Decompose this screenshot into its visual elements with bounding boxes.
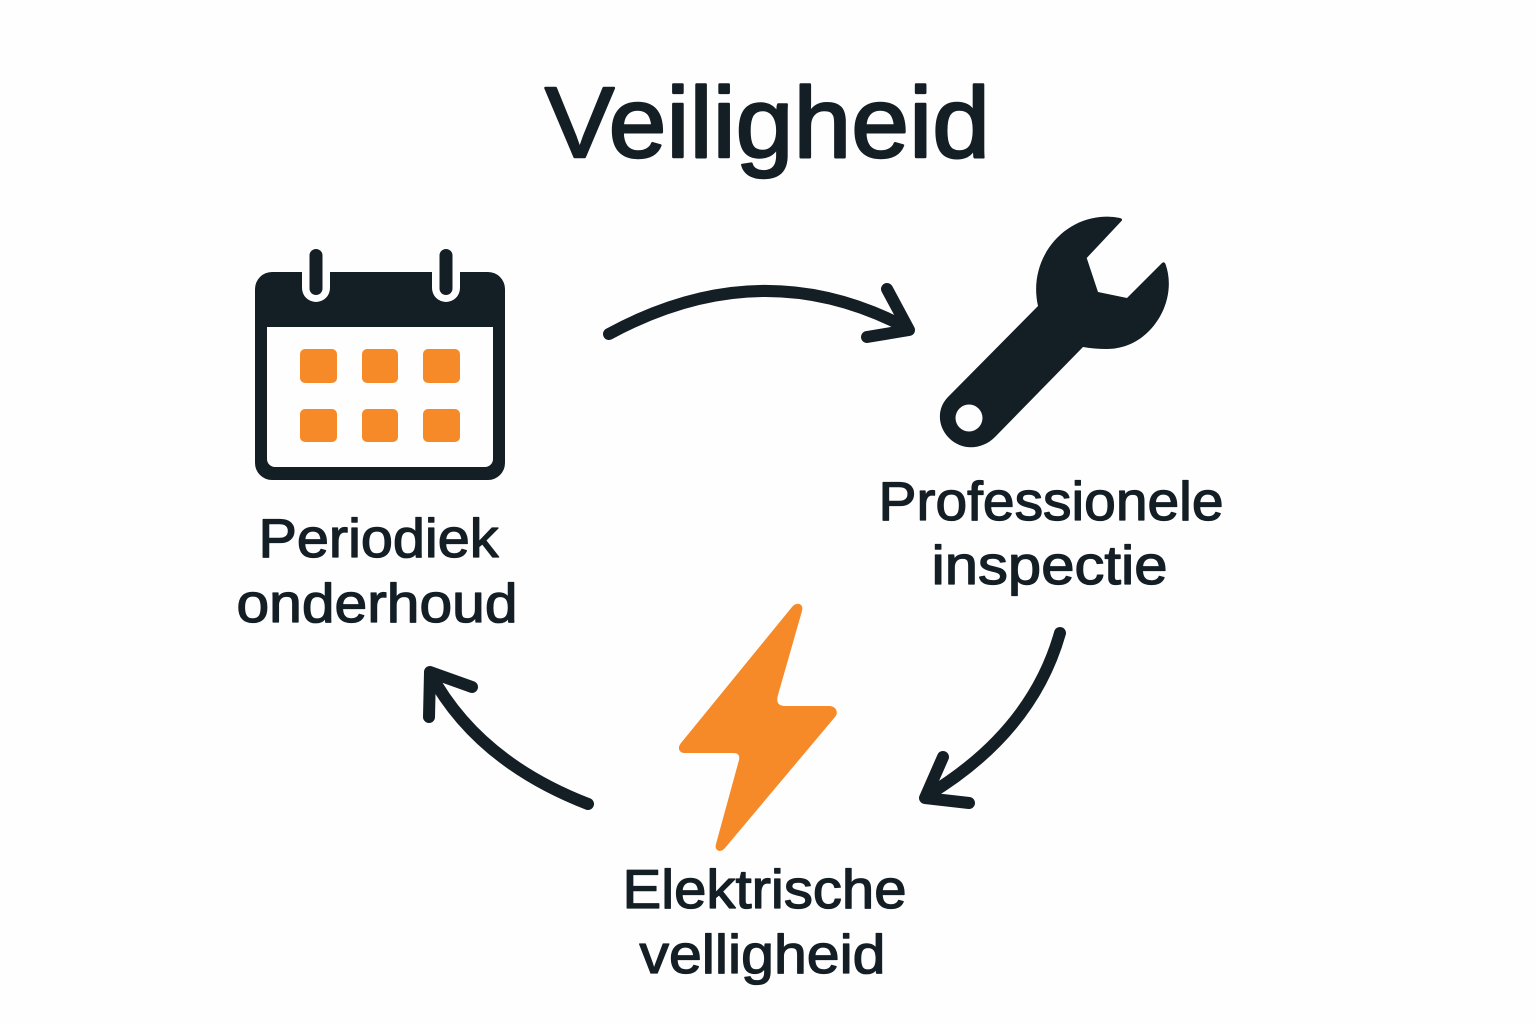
label: professionele inspectie [878,470,1224,596]
label: professionele inspectie: Professionele [878,470,1224,532]
label: elektrische velligheid [622,858,906,985]
label: periodiek onderhoud: onderhoud [236,572,518,634]
step: professionele inspectie [878,217,1224,596]
label: elektrische velligheid: Elektrische [622,858,906,920]
arrow: bolt to calendar [429,672,588,804]
label: elektrische velligheid: velligheid [640,923,886,985]
arrow: calendar to wrench [609,289,909,337]
icon: lightning bolt [679,604,837,851]
icon: calendar [255,249,505,480]
icon: wrench [940,217,1169,447]
step: elektrische velligheid [622,604,906,985]
title: Veiligheid [545,67,990,179]
label: professionele inspectie: inspectie [932,534,1168,596]
label: periodiek onderhoud [236,507,518,634]
step: periodiek onderhoud [236,249,518,634]
arrow: wrench to bolt [925,633,1060,803]
label: periodiek onderhoud: Periodiek [258,507,499,569]
